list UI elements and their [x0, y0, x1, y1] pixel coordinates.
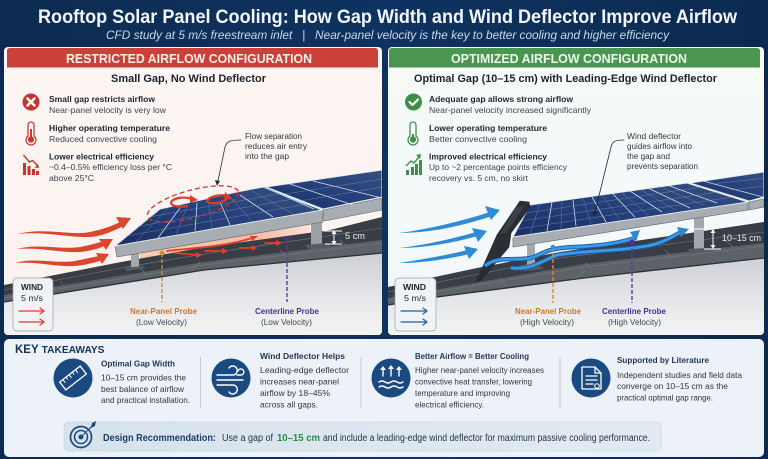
probe: centerline — [284, 236, 290, 302]
takeaway: wind deflector helps: Wind Deflector Helps — [260, 351, 345, 361]
wind arrows: red — [15, 217, 131, 266]
takeaway: supported by literature: practical optimal gap range. — [617, 393, 713, 403]
wind legend: blue: 5 m/s — [404, 294, 426, 303]
callout: flow separation: Flow separation — [245, 132, 302, 141]
probe: centerline — [630, 240, 634, 303]
callout: flow separation — [215, 132, 307, 186]
text: improved efficiency — [429, 152, 568, 183]
text: higher operating temperature: Higher operating temperature — [49, 123, 170, 133]
label: centerline probe high velocity: (High Velocity) — [608, 317, 661, 327]
takeaway: supported by literature — [572, 355, 742, 403]
high velocity gap flow — [486, 227, 689, 268]
text: lower electrical efficiency — [49, 152, 172, 183]
label: near-panel probe low velocity — [130, 306, 197, 327]
takeaway: wind deflector helps: increases near-panel — [260, 377, 339, 387]
subtitle: CFD study at 5 m/s freestream inlet | Near-panel velocity is the key to better cooling and higher efficiency — [106, 30, 670, 42]
icon: document — [572, 358, 610, 398]
design recommendation bar: Design Recommendation: — [103, 432, 216, 444]
panel: restricted airflow configuration — [4, 47, 382, 335]
text: lower operating temperature: Lower operating temperature — [429, 123, 547, 133]
takeaway: better airflow better cooling: Higher near-panel velocity increases — [415, 365, 544, 375]
text: lower operating temperature: Better convective cooling — [429, 134, 527, 144]
takeaway: supported by literature: Independent studies and field data — [617, 370, 742, 380]
wind legend: blue: WIND — [403, 283, 426, 292]
flow separation swirl — [146, 185, 240, 223]
callout: wind deflector: prevents separation — [627, 162, 698, 171]
text: lower electrical efficiency: above 25°C — [49, 173, 94, 183]
label: near-panel probe high velocity — [515, 306, 581, 327]
heading: optimized: OPTIMIZED AIRFLOW CONFIGURATION — [451, 51, 687, 66]
gap dimension: 10-15 cm: 10–15 cm — [722, 233, 761, 243]
text: adequate gap — [429, 94, 592, 115]
heading: key takeaways: KEY TAKEAWAYS — [15, 344, 105, 356]
icon: rising bar chart — [406, 154, 422, 175]
design recommendation bar: 10–15 cm — [277, 432, 320, 444]
wind deflector — [476, 201, 530, 282]
text: small gap restricts airflow — [49, 94, 167, 115]
gap dimension: 5 cm — [323, 230, 365, 245]
icon: red thermometer — [26, 122, 36, 145]
text: higher operating temperature — [49, 123, 170, 144]
icon: ruler — [54, 358, 92, 398]
icon: wind — [212, 358, 250, 398]
probe: near-panel — [160, 250, 164, 302]
takeaway: wind deflector helps: Leading-edge deflector — [260, 365, 349, 375]
takeaway: wind deflector helps: airflow by 18–45% — [260, 388, 330, 398]
label: near-panel probe low velocity: Near-Panel Probe — [130, 306, 197, 316]
takeaway: better airflow better cooling: temperature and improving — [415, 388, 510, 398]
callout: wind deflector: the gap and — [627, 152, 670, 161]
gap dimension: 10-15 cm — [694, 229, 761, 249]
design recommendation bar — [64, 421, 661, 451]
icon: red cross — [22, 94, 40, 110]
label: centerline probe low velocity: Centerline Probe — [255, 306, 319, 316]
takeaway: better airflow better cooling: electrical efficiency. — [415, 400, 484, 410]
callout: wind deflector — [592, 132, 698, 217]
label: centerline probe low velocity — [255, 306, 319, 327]
design recommendation bar: Use a gap of — [222, 433, 273, 444]
takeaway: better airflow better cooling: convective heat transfer, lowering — [415, 377, 532, 387]
icon: green thermometer — [408, 122, 418, 145]
takeaway: optimal gap width: 10–15 cm provides the — [101, 373, 186, 383]
text: higher operating temperature: Reduced convective cooling — [49, 134, 157, 144]
takeaway: wind deflector helps — [212, 351, 349, 410]
support legs — [520, 215, 712, 271]
heading: restricted — [7, 48, 378, 68]
takeaway: better airflow better cooling — [372, 351, 544, 410]
wind arrows: blue — [399, 206, 500, 263]
takeaway: supported by literature: converge on 10–15 cm as the — [617, 381, 728, 391]
text: improved efficiency: Improved electrical efficiency — [429, 152, 547, 162]
takeaway: optimal gap width: and practical installation. — [101, 395, 190, 405]
callout: wind deflector: guides airflow into — [627, 142, 693, 151]
label: near-panel probe high velocity: Near-Panel Probe — [515, 306, 581, 316]
label: centerline probe high velocity: Centerline Probe — [602, 306, 666, 316]
illustration: roof with panel and small gap — [4, 170, 382, 335]
callout: wind deflector: Wind deflector — [627, 132, 681, 141]
heading: restricted: RESTRICTED AIRFLOW CONFIGURATION — [66, 51, 312, 66]
callout: flow separation: reduces air entry — [245, 142, 307, 151]
takeaway: optimal gap width: Optimal Gap Width — [101, 359, 175, 369]
text: lower electrical efficiency: ~0.4–0.5% efficiency loss per °C — [49, 162, 172, 172]
takeaway: better airflow better cooling: Better Airflow = Better Cooling — [415, 351, 529, 361]
takeaway: optimal gap width: best balance of airflow — [101, 384, 185, 394]
text: adequate gap: Near-panel velocity increased significantly — [429, 105, 592, 115]
wind legend: red: 5 m/s — [21, 294, 43, 303]
icon: green check — [405, 94, 422, 110]
icon: heat rising from waves — [372, 358, 410, 398]
callout: flow separation: into the gap — [245, 152, 290, 161]
support legs — [124, 220, 331, 271]
text: adequate gap: Adequate gap allows strong airflow — [429, 94, 573, 104]
heading: optimized — [389, 48, 760, 68]
wind legend: red — [13, 278, 53, 331]
text: lower electrical efficiency: Lower electrical efficiency — [49, 152, 154, 162]
panel: optimized airflow configuration — [388, 47, 764, 335]
label: centerline probe low velocity: (Low Velocity) — [261, 317, 312, 327]
title: Rooftop Solar Panel Cooling: How Gap Width and Wind Deflector Improve Airflow — [38, 7, 737, 28]
panel: key takeaways — [4, 339, 764, 457]
text: small gap restricts airflow: Small gap restricts airflow — [49, 94, 155, 104]
wind legend: red: WIND — [21, 283, 43, 292]
label: centerline probe high velocity — [602, 306, 666, 327]
text: improved efficiency: Up to ~2 percentage points efficiency — [429, 162, 568, 172]
subheading: small gap: Small Gap, No Wind Deflector — [111, 73, 267, 85]
icon: target — [70, 421, 96, 448]
label: near-panel probe low velocity: (Low Velocity) — [136, 317, 187, 327]
design recommendation bar: and include a leading-edge wind deflector for maximum passive cooling performance. — [323, 433, 650, 444]
subheading: optimal gap: Optimal Gap (10–15 cm) with Leading-Edge Wind Deflector — [414, 73, 718, 85]
low velocity gap flow — [167, 236, 282, 258]
text: lower operating temperature — [429, 123, 547, 144]
solar panel — [513, 172, 764, 247]
text: small gap restricts airflow: Near-panel velocity is very low — [49, 105, 167, 115]
icon: falling bar chart — [23, 155, 39, 175]
takeaway: wind deflector helps: across all gaps. — [260, 400, 318, 410]
wind legend: blue — [395, 278, 436, 331]
probe: near-panel — [551, 245, 555, 303]
illustration: roof with panel, deflector and wide gap — [388, 172, 764, 335]
takeaway: optimal gap width — [54, 358, 190, 405]
takeaway: supported by literature: Supported by Literature — [617, 355, 709, 365]
gap dimension: 5 cm: 5 cm — [345, 231, 365, 241]
solar panel — [115, 170, 382, 257]
text: improved efficiency: recovery vs. 5 cm, no skirt — [429, 173, 529, 183]
label: near-panel probe high velocity: (High Velocity) — [520, 317, 574, 327]
